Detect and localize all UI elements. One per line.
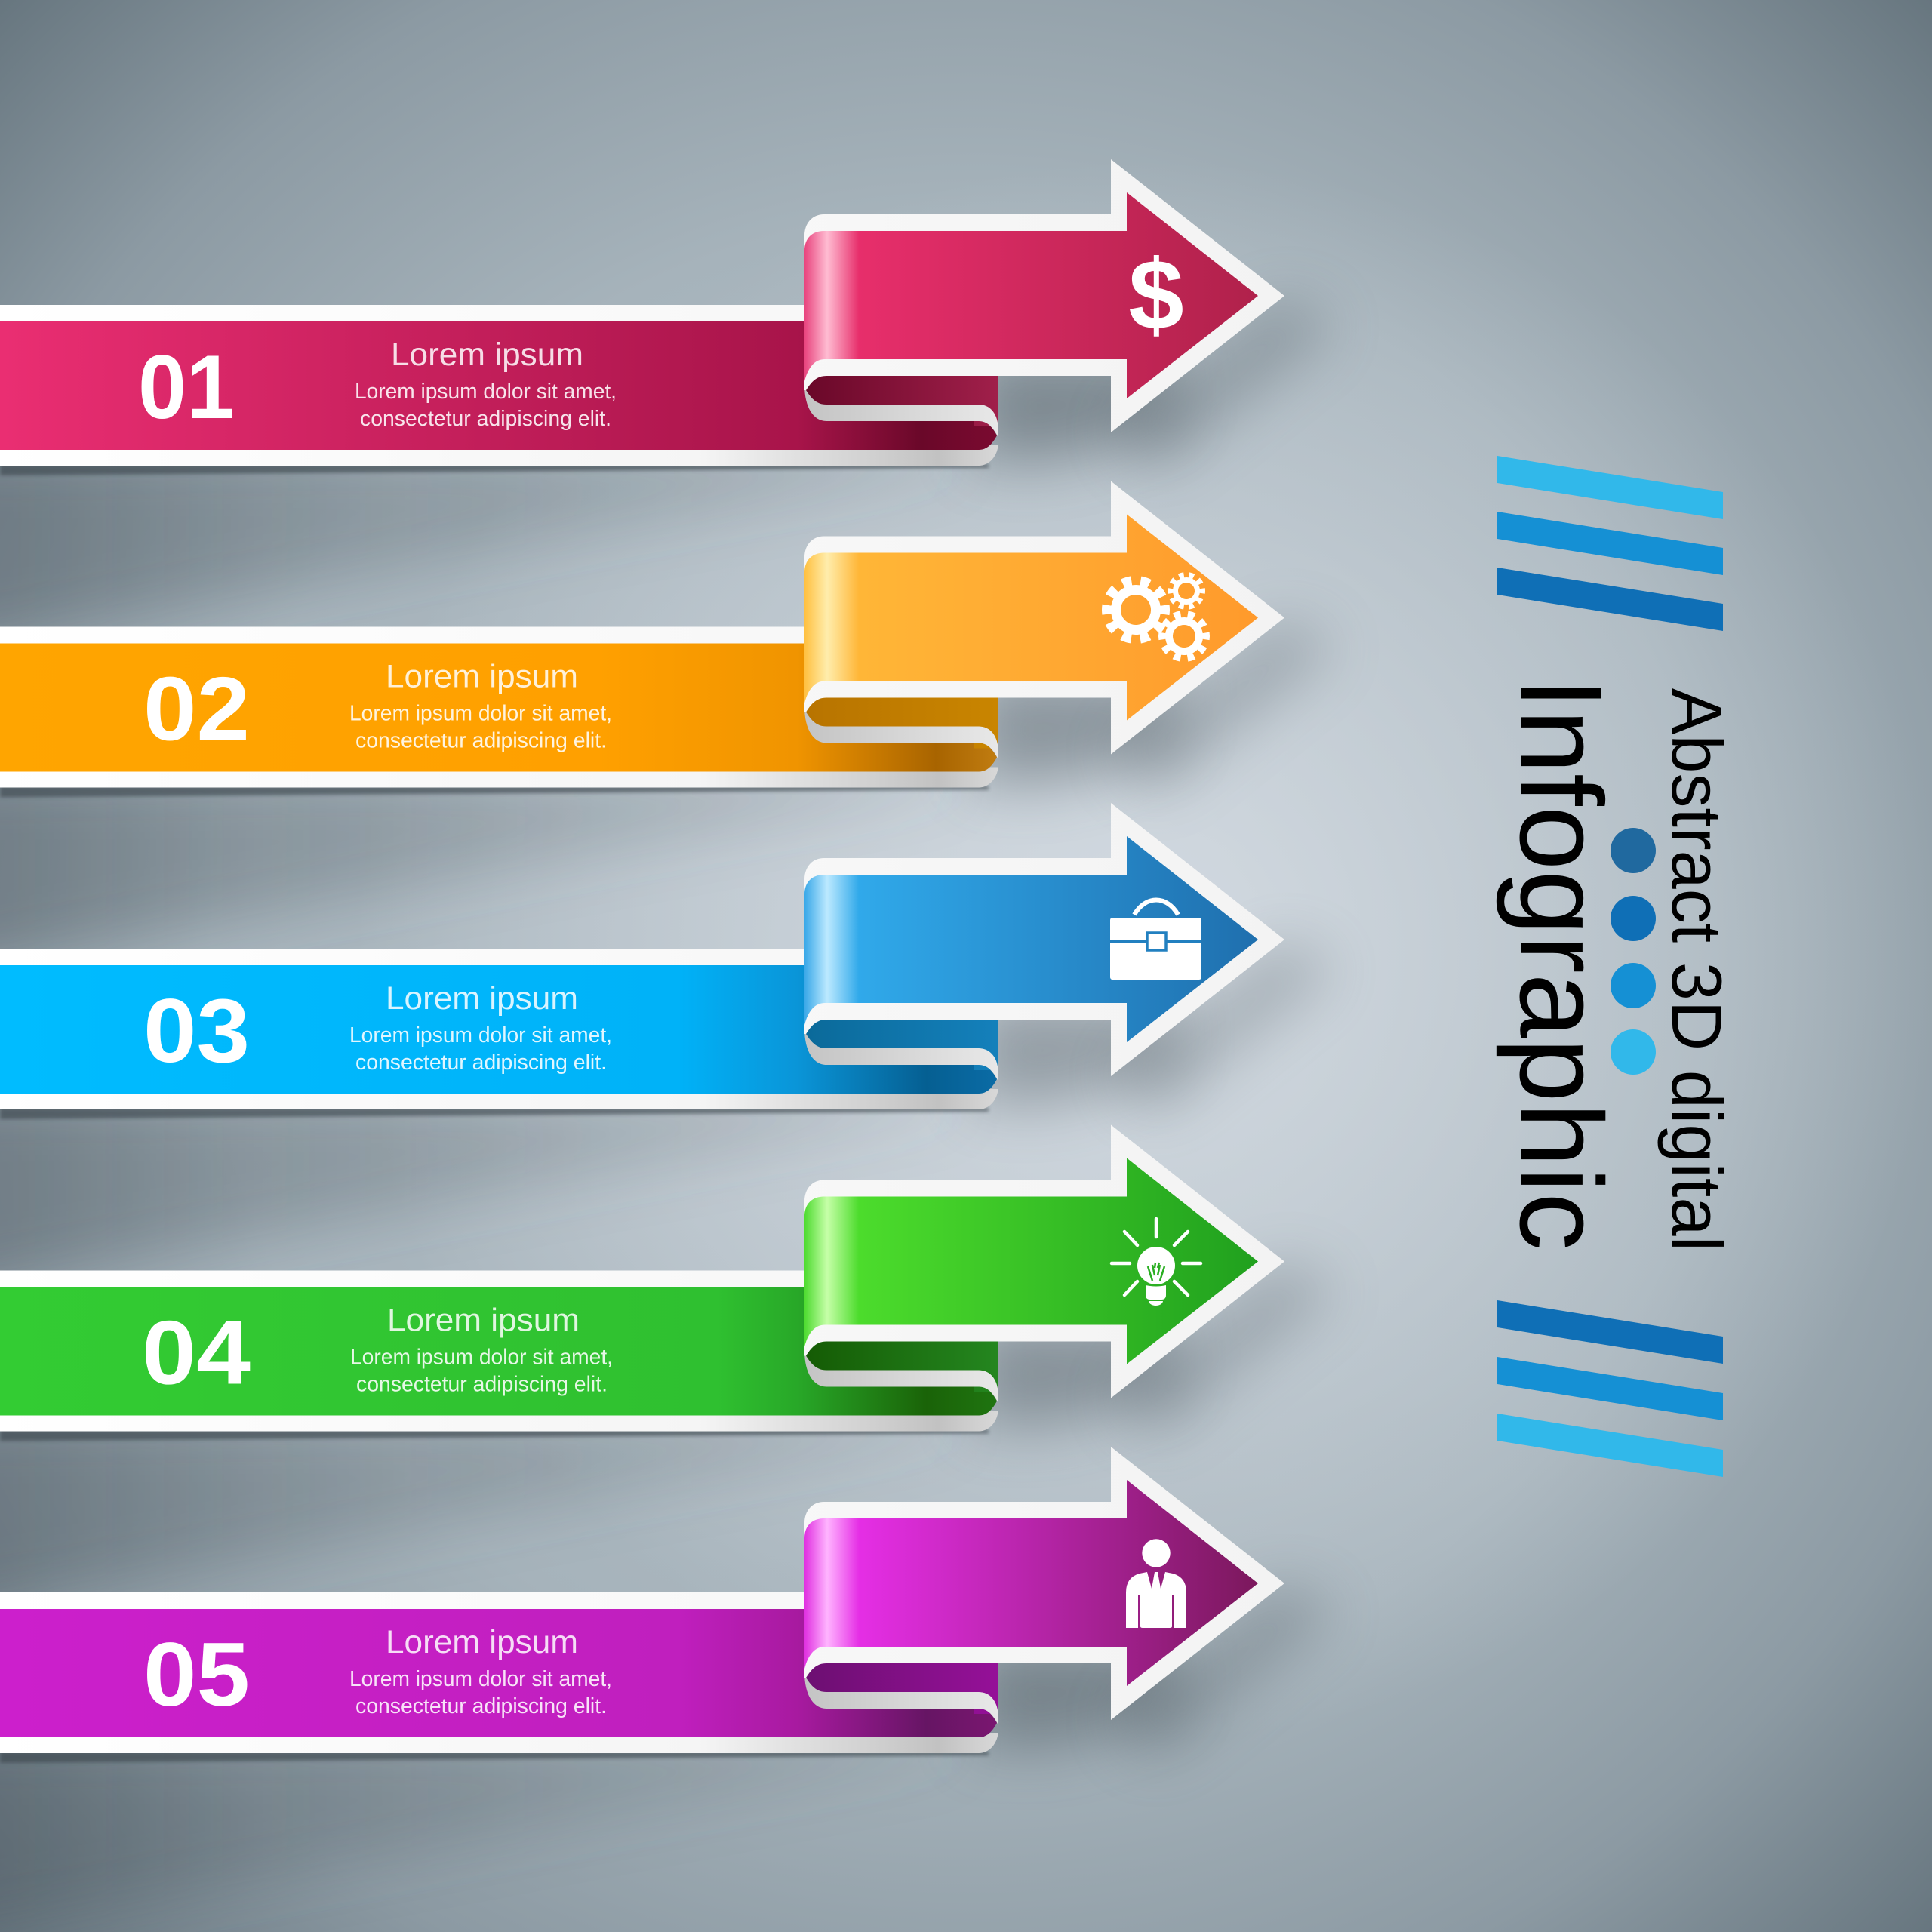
bottom stripes (1497, 1300, 1723, 1477)
row 02: orange ribbon arrow (0, 481, 1336, 971)
row 03: blue ribbon arrow (0, 803, 1336, 1293)
ribbon strip (0, 949, 998, 1109)
icon: light bulb (1112, 1219, 1201, 1306)
arrow (804, 803, 1284, 1076)
number: 02 (143, 658, 250, 759)
number: 05 (143, 1624, 250, 1725)
row 01: red ribbon arrow (0, 159, 1336, 649)
body text (349, 702, 612, 753)
shadows (0, 1583, 1336, 1932)
icon: gears (1103, 573, 1209, 661)
ribbon fold (804, 1663, 998, 1725)
top stripes (1497, 456, 1723, 631)
heading: Lorem ipsum (386, 1624, 578, 1660)
icon: briefcase (1110, 900, 1201, 980)
heading: Lorem ipsum (386, 980, 578, 1017)
body text: consectetur adipiscing elit. (355, 1694, 607, 1718)
body text: Lorem ipsum dolor sit amet, (355, 380, 617, 404)
main title text: Infographic (1496, 677, 1626, 1251)
body text: Lorem ipsum dolor sit amet, (349, 1023, 612, 1048)
row 04: green ribbon arrow (0, 1124, 1336, 1615)
arrow (804, 1447, 1284, 1720)
body text (355, 380, 617, 431)
shadows (0, 1262, 1336, 1615)
body text: Lorem ipsum dolor sit amet, (350, 1345, 613, 1369)
number: 01 (138, 337, 235, 438)
heading: Lorem ipsum (386, 658, 578, 694)
body text (349, 1023, 612, 1075)
body text (350, 1345, 613, 1396)
dots (1611, 828, 1656, 1075)
title panel (1496, 456, 1737, 1477)
ribbon strip (0, 626, 998, 788)
heading: Lorem ipsum (391, 337, 583, 373)
ribbon strip (0, 1271, 998, 1431)
body text: Lorem ipsum dolor sit amet, (349, 1667, 612, 1691)
arrow (804, 159, 1284, 432)
body text: Lorem ipsum dolor sit amet, (349, 702, 612, 726)
icon: dollar: $ (1128, 239, 1184, 350)
body text: consectetur adipiscing elit. (355, 729, 607, 753)
heading: Lorem ipsum (387, 1303, 580, 1339)
shadows (0, 617, 1336, 971)
body text: consectetur adipiscing elit. (360, 407, 611, 431)
arrow (804, 1124, 1284, 1398)
number: 03 (143, 980, 250, 1081)
ribbon fold (804, 376, 998, 438)
ribbon fold (804, 697, 998, 759)
ribbon strip (0, 305, 998, 466)
body text: consectetur adipiscing elit. (355, 1051, 607, 1075)
body text (349, 1667, 612, 1718)
ribbon strip (0, 1592, 998, 1753)
shadows (0, 296, 1336, 649)
ribbon fold (804, 1342, 998, 1404)
row 05: purple ribbon arrow (0, 1447, 1336, 1932)
body text: consectetur adipiscing elit. (356, 1372, 608, 1396)
icon: businessman (1126, 1539, 1186, 1628)
subtitle text: Abstract 3D digital (1657, 688, 1737, 1251)
shadows (0, 940, 1336, 1293)
arrow (804, 481, 1284, 755)
number: 04 (142, 1303, 251, 1404)
ribbon fold (804, 1020, 998, 1081)
